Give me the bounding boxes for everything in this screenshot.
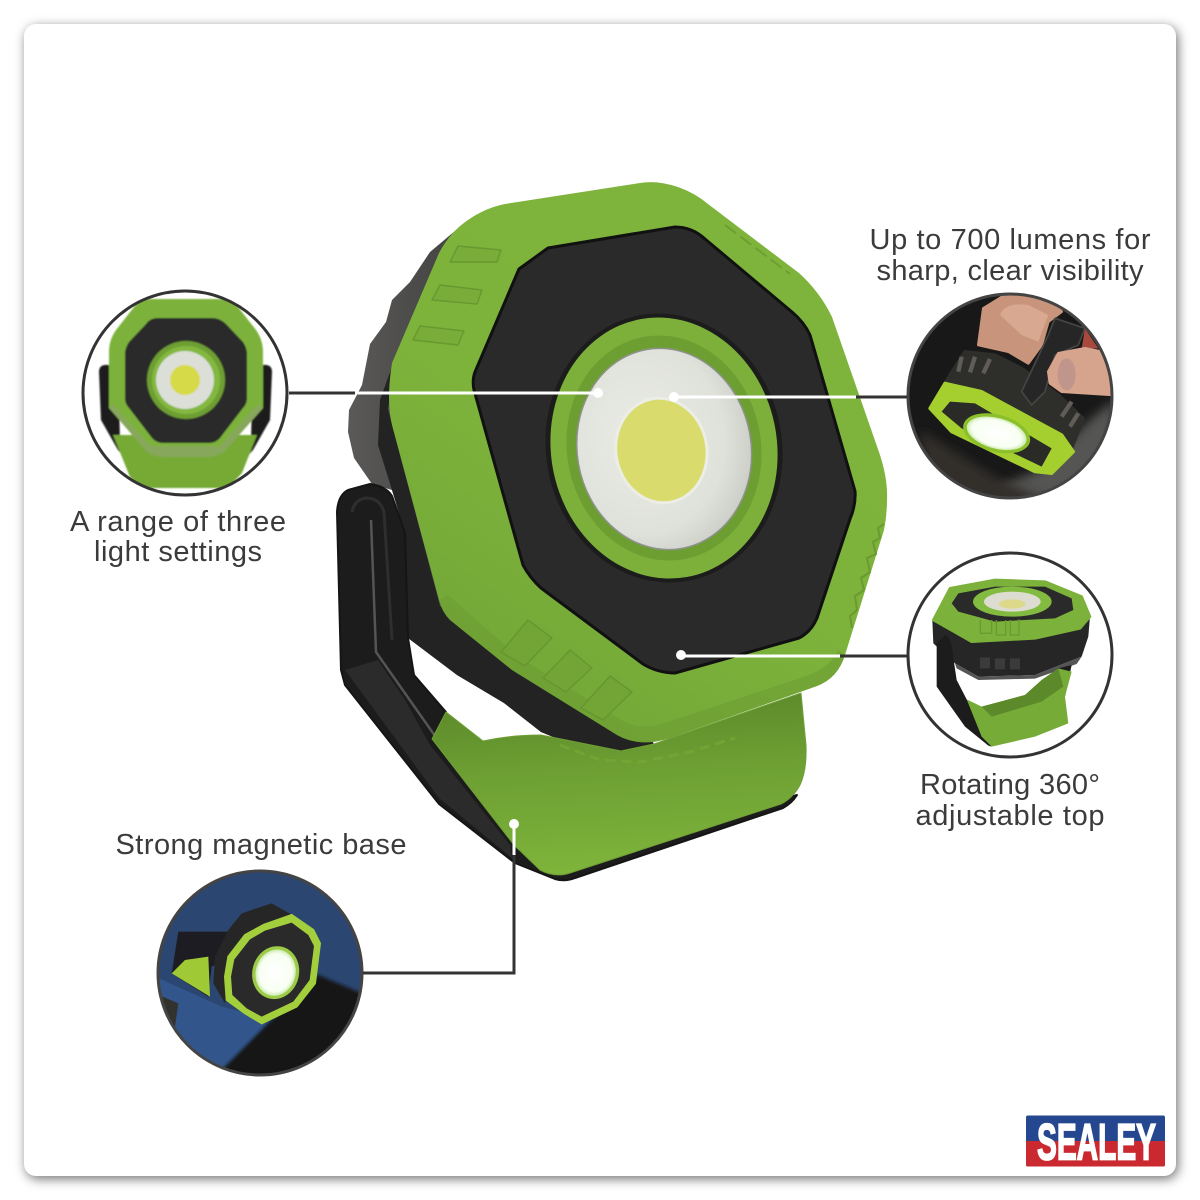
lamp rear housing	[348, 220, 654, 751]
caption: Rotating 360 adjustable top	[916, 769, 1104, 832]
black face panel	[473, 227, 855, 673]
callout: magnetic base	[116, 829, 406, 1080]
caption: Up to 700 lumens: sharp, clear visibility	[876, 255, 1144, 287]
circle outline	[908, 294, 1112, 498]
callout: rotating top	[908, 553, 1112, 832]
caption: A range of three light settings: light settings	[94, 536, 262, 568]
left grip ribs	[413, 246, 501, 345]
caption: A range of three light settings	[70, 506, 286, 568]
right edge ribs	[850, 524, 884, 628]
main product: work light	[337, 182, 887, 880]
circle outline	[158, 871, 362, 1075]
photo: front view of light	[99, 299, 272, 488]
photo: light attached to vehicle panel	[160, 872, 360, 1074]
lens ring and COB LED	[524, 295, 804, 601]
leader line: lumens	[669, 392, 907, 402]
callout: lumens	[870, 224, 1151, 505]
green bezel	[389, 182, 887, 742]
folding stand	[337, 484, 797, 880]
caption: A range of three light settings: A range of three	[70, 506, 286, 538]
leader line: rotating top	[676, 650, 907, 660]
caption: Rotating 360 adjustable top: adjustable top	[916, 800, 1104, 832]
circle outline	[83, 291, 287, 495]
caption: Rotating 360 adjustable top: Rotating 360°	[920, 769, 1100, 801]
caption: Up to 700 lumens: Up to 700 lumens for	[870, 224, 1151, 256]
caption: Strong magnetic base: Strong magnetic base	[116, 829, 406, 861]
magnetic base	[432, 693, 806, 875]
caption: Up to 700 lumens	[870, 224, 1151, 287]
photo: hand holding light	[910, 296, 1110, 496]
leader line: light settings	[289, 388, 603, 398]
photo: light rotated flat	[932, 580, 1090, 747]
leader line: magnetic base	[363, 819, 519, 973]
circle outline	[908, 553, 1112, 757]
infographic canvas	[70, 182, 1165, 1166]
lower grip ribs	[501, 620, 632, 720]
callout: light settings	[70, 291, 287, 568]
